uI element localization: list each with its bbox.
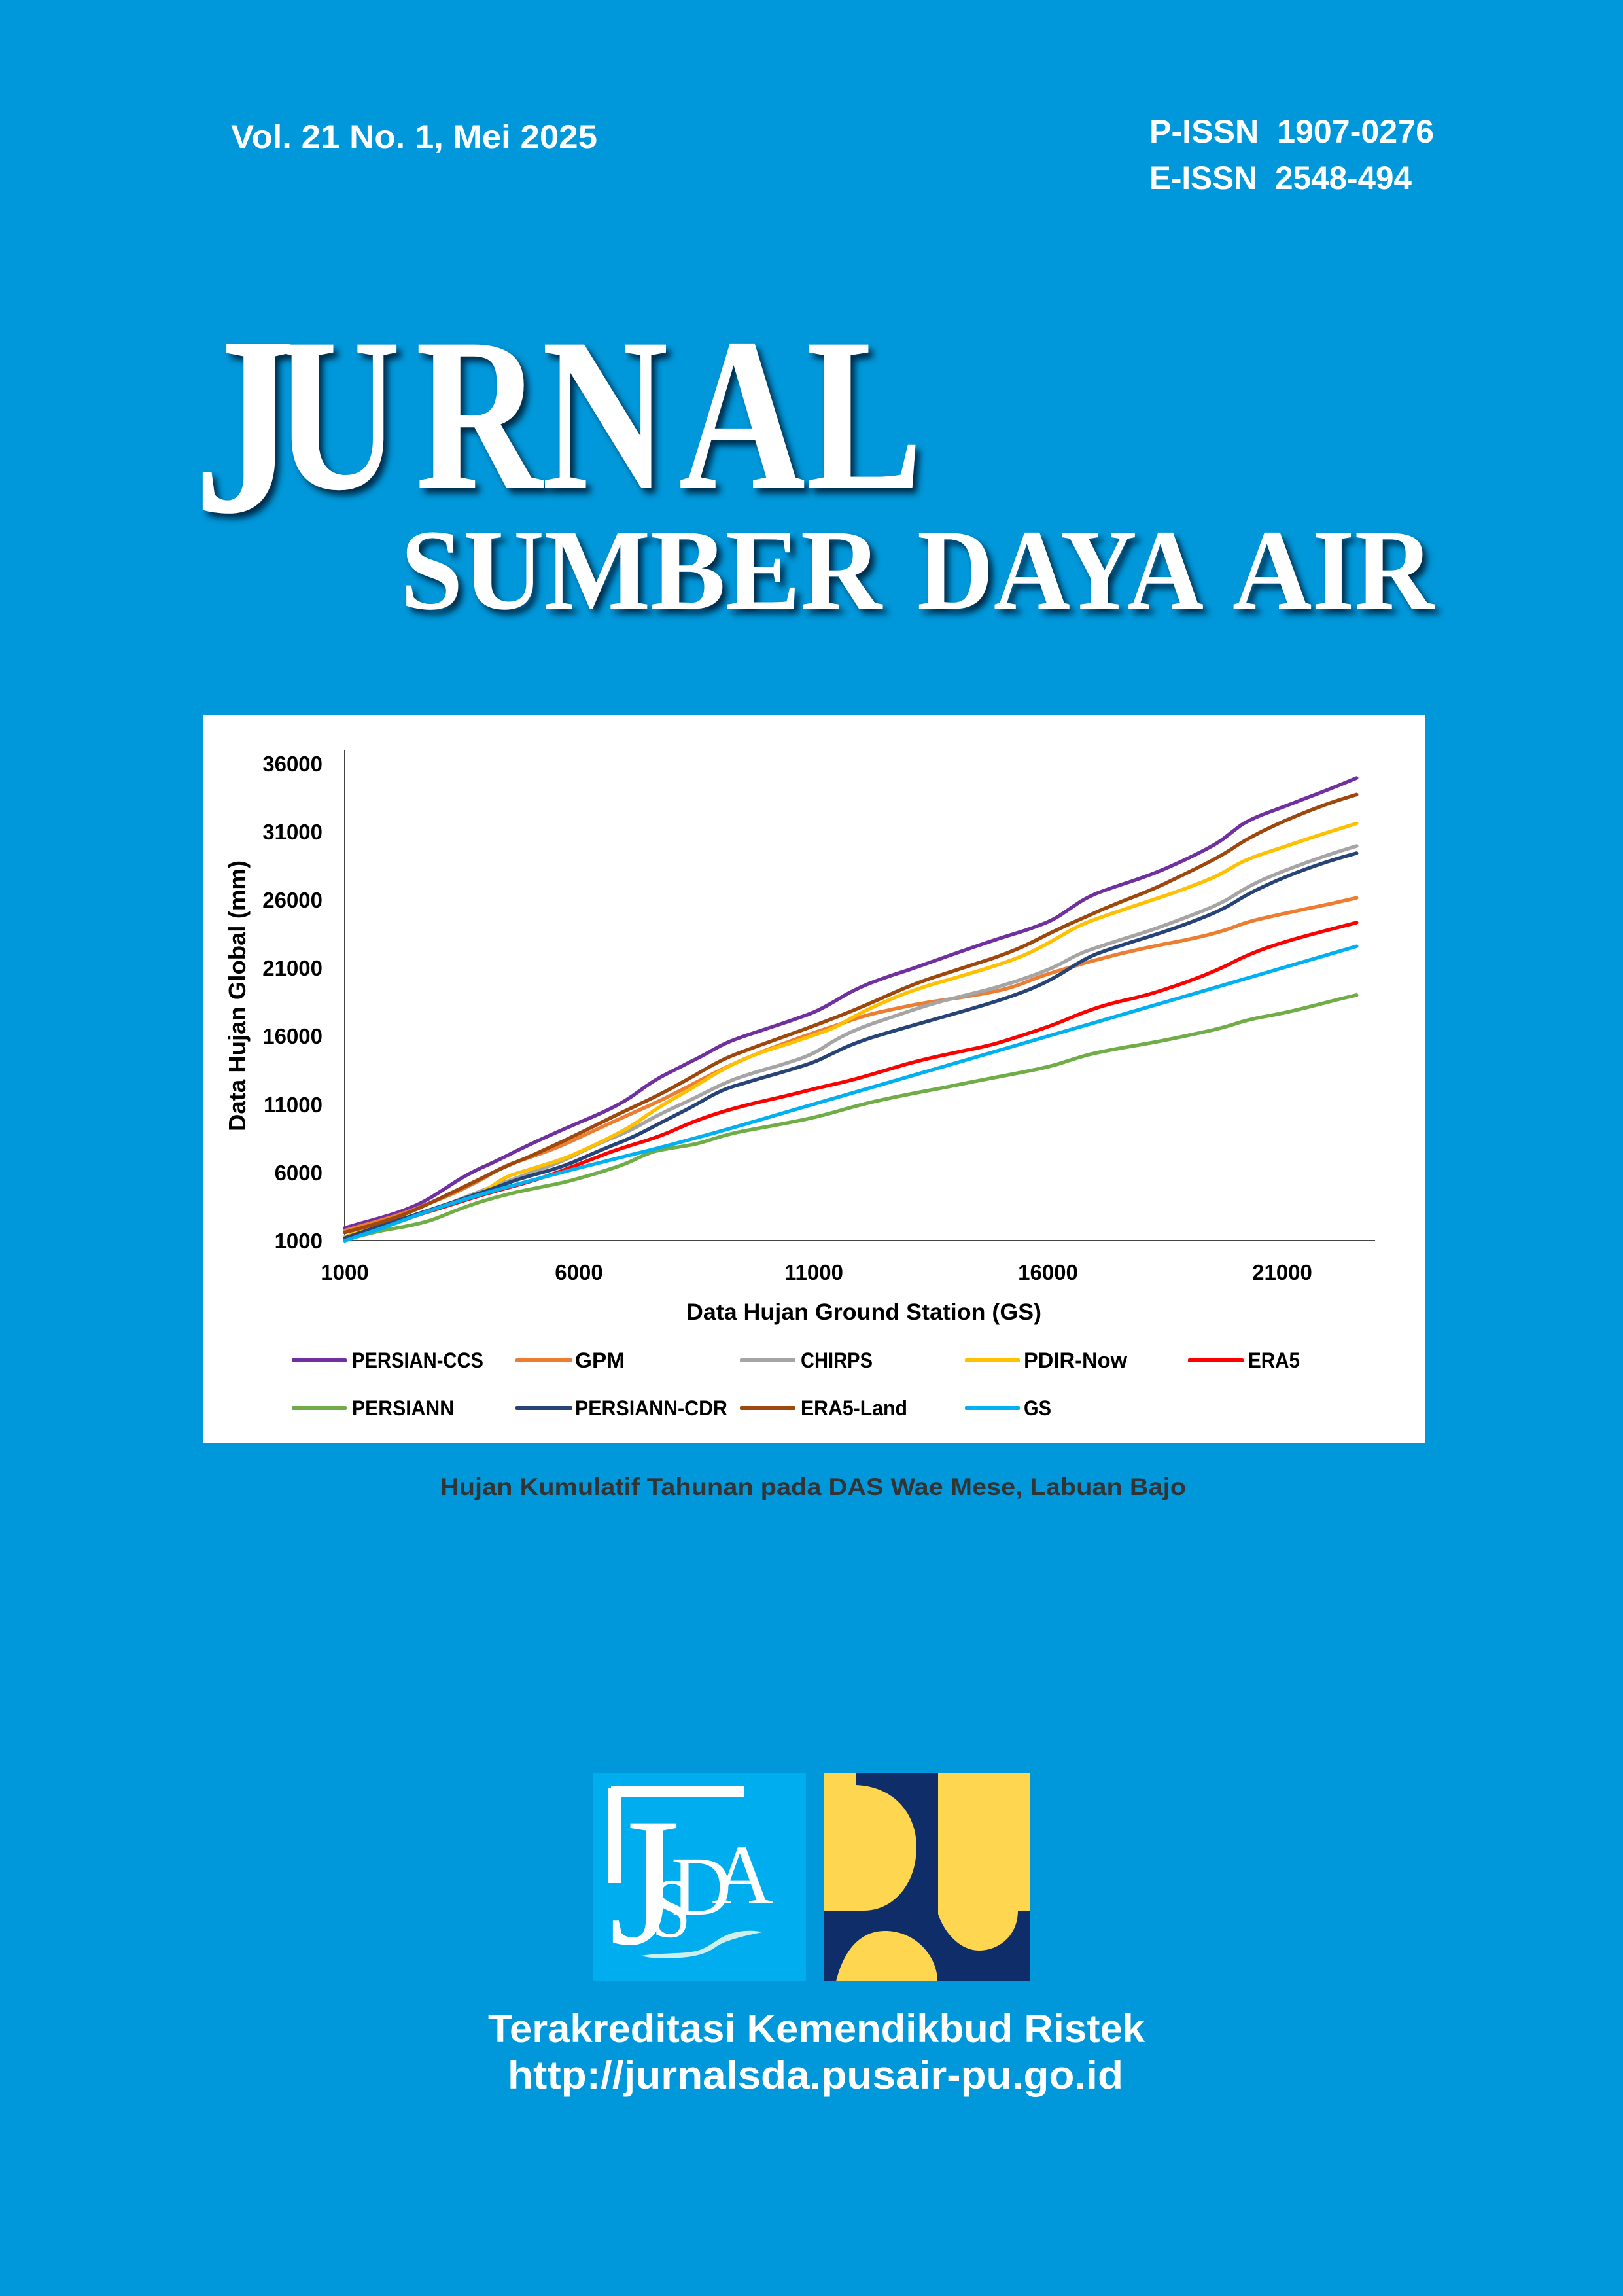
volume and issue: Vol. 21 No. 1, Mei 2025	[231, 118, 597, 155]
title: JURNAL: URNAL	[274, 293, 923, 536]
title: SUMBER DAYA AIR: AIR	[1232, 506, 1435, 634]
logo: JSDA: A	[712, 1828, 773, 1922]
logo: JSDA: J	[609, 1780, 680, 1983]
x axis labels: 11000	[784, 1260, 843, 1284]
logo: JSDA: D	[671, 1840, 731, 1933]
legend: CHIRPS	[801, 1349, 873, 1372]
legend: PERSIAN-CCS	[352, 1349, 483, 1372]
y axis labels: 21000	[262, 956, 323, 980]
logo: JSDA	[593, 1773, 806, 1983]
y axis labels: 1000	[275, 1229, 323, 1253]
legend: GPM	[575, 1349, 625, 1372]
y axis labels: 6000	[275, 1161, 323, 1185]
line chart series	[345, 778, 1357, 1241]
ISSN numbers	[1149, 113, 1434, 196]
chart caption: Hujan Kumulatif Tahunan pada DAS Wae Mese, Labuan Bajo	[440, 1474, 1186, 1500]
y axis labels: 16000	[262, 1024, 323, 1048]
x axis labels: 16000	[1018, 1260, 1078, 1284]
title: JURNAL: J	[194, 284, 296, 567]
y axis labels: 11000	[264, 1093, 323, 1117]
y axis labels: 26000	[262, 888, 323, 912]
y axis labels	[262, 752, 323, 1253]
legend: GS	[1024, 1396, 1051, 1420]
ISSN numbers: P-ISSN 1907-0276	[1149, 113, 1434, 150]
legend: PERSIANN	[352, 1396, 454, 1420]
x axis labels: 1000	[321, 1260, 369, 1284]
accreditation text: Terakreditasi Kemendikbud Ristek	[488, 2007, 1145, 2051]
axes	[345, 750, 1375, 1241]
legend: ERA5	[1248, 1349, 1300, 1372]
legend	[292, 1349, 1300, 1420]
y axis title: Data Hujan Global (mm)	[224, 860, 251, 1131]
ISSN numbers: E-ISSN 2548-494	[1149, 160, 1412, 196]
title: SUMBER DAYA AIR: SUMBER	[400, 506, 883, 634]
logo: PU	[824, 1773, 1030, 1981]
y axis labels: 36000	[262, 752, 323, 776]
x axis labels	[321, 1260, 1312, 1284]
x axis labels: 21000	[1252, 1260, 1312, 1284]
title: SUMBER DAYA AIR: DAYA	[917, 506, 1204, 634]
panel: chart	[203, 715, 1425, 1443]
legend: ERA5-Land	[801, 1396, 907, 1420]
website url: http://jurnalsda.pusair-pu.go.id	[508, 2053, 1123, 2097]
legend: PDIR-Now	[1024, 1349, 1127, 1372]
x axis title: Data Hujan Ground Station (GS)	[686, 1299, 1041, 1325]
y axis labels: 31000	[262, 820, 323, 844]
x axis labels: 6000	[555, 1260, 603, 1284]
logo: JSDA: S	[652, 1862, 691, 1956]
title: SUMBER DAYA AIR	[400, 506, 1435, 634]
legend: PERSIANN-CDR	[575, 1396, 727, 1420]
